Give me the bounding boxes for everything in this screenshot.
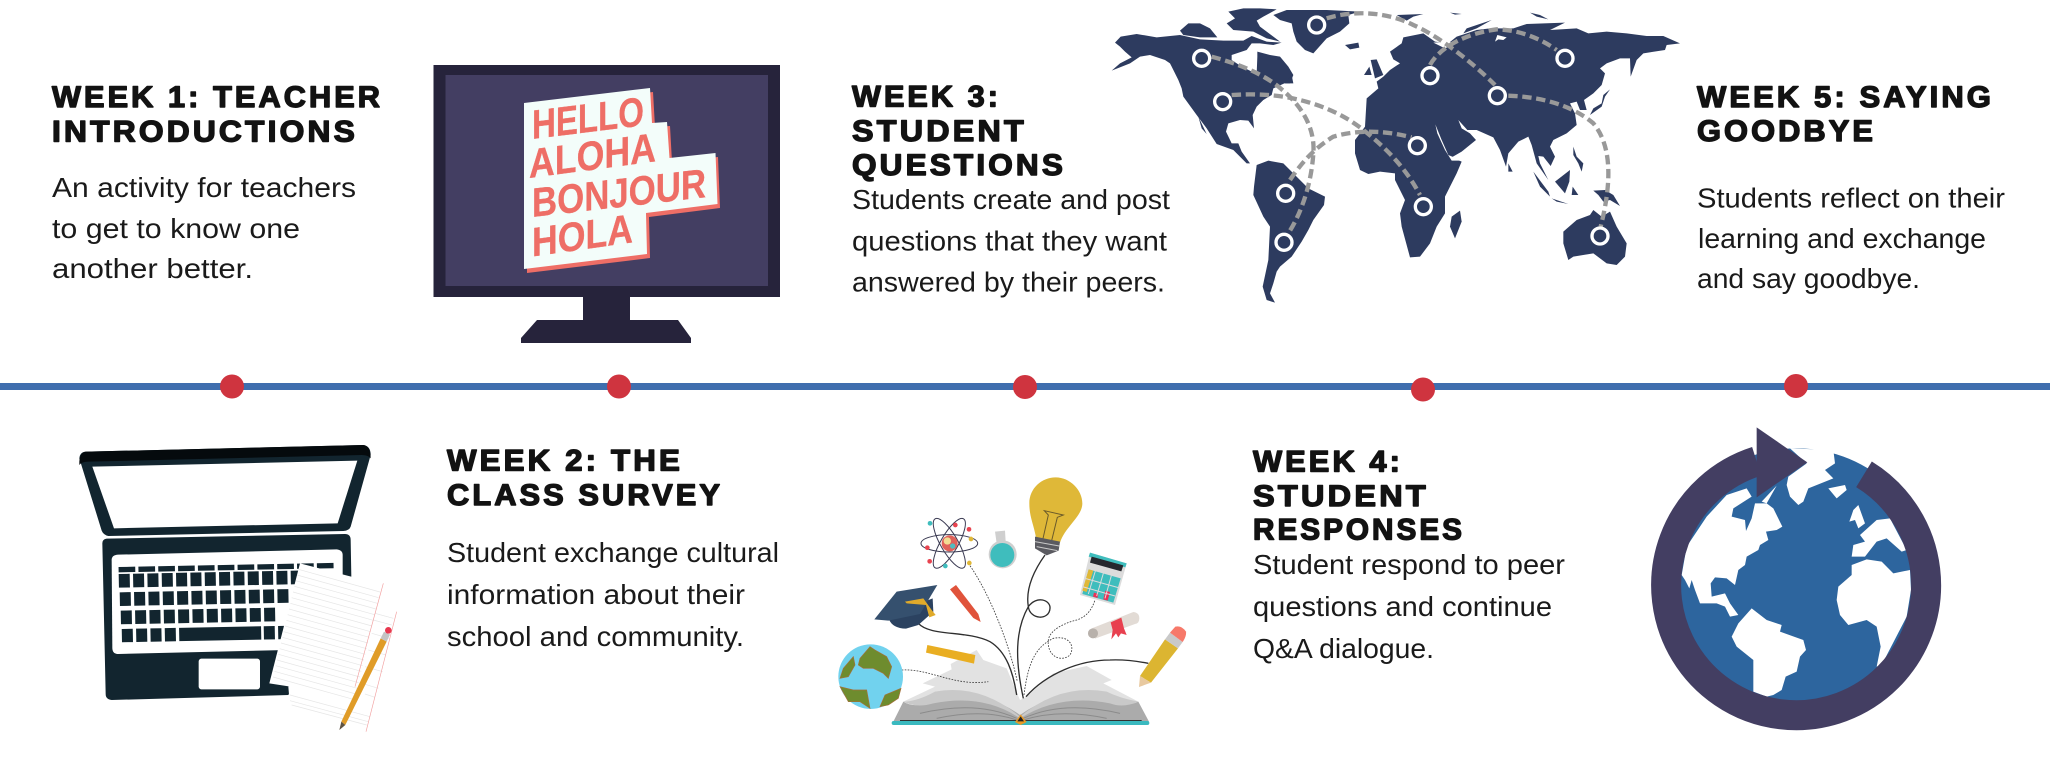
heading: week 4: RESPONSES xyxy=(1253,514,1465,546)
heading: week 3: QUESTIONS xyxy=(852,149,1066,182)
paper margin lines xyxy=(355,583,397,732)
calculator xyxy=(1080,553,1127,605)
pencil ferrule xyxy=(381,632,390,642)
pencil wood tip xyxy=(1139,676,1151,687)
timeline dot week 5 xyxy=(1784,374,1808,398)
circular arrow head xyxy=(1757,427,1807,497)
text block: week 4 xyxy=(1253,549,1565,664)
map: islands xyxy=(1397,13,1627,265)
monitor screen xyxy=(446,75,768,286)
text block: week 1: to get to know one xyxy=(52,213,300,244)
text block: week 3: answered by their peers. xyxy=(852,266,1165,298)
book cover xyxy=(892,721,1149,725)
text block: week 5: and say goodbye. xyxy=(1697,263,1920,294)
timeline line xyxy=(0,383,2050,390)
cap tassel xyxy=(905,598,936,617)
panel: week 3 text xyxy=(852,80,1170,298)
keyboard keys xyxy=(119,563,335,642)
panel: week 5 text xyxy=(1697,81,2005,294)
heading: week 3 xyxy=(852,80,1066,182)
scroll ribbon xyxy=(1111,618,1127,639)
pencil body xyxy=(341,638,387,725)
panel: week 1 text xyxy=(52,81,383,284)
panel: week 2 text xyxy=(447,444,779,652)
text block: week 5: Students reflect on their xyxy=(1697,182,2005,214)
map: location markers xyxy=(1194,17,1608,250)
text block: week 3: Students create and post xyxy=(852,184,1170,215)
text block: week 4: questions and continue xyxy=(1253,591,1552,622)
heading: week 5 xyxy=(1697,81,1994,148)
text block: week 2: school and community. xyxy=(447,621,744,652)
greeting sign shadow xyxy=(527,92,720,273)
dashed curves xyxy=(902,563,1095,695)
pencil ferrule xyxy=(1165,633,1183,648)
heading: week 3: STUDENT xyxy=(852,115,1027,148)
bulb glass xyxy=(1029,477,1082,543)
timeline xyxy=(0,374,2050,402)
heading: week 4 xyxy=(1253,446,1465,546)
yellow pencil xyxy=(1139,626,1186,687)
map: seas xyxy=(1433,35,1507,161)
flask xyxy=(989,531,1017,568)
text block: week 3 xyxy=(852,184,1170,298)
laptop lid top edge xyxy=(79,445,371,465)
timeline dot week 1 xyxy=(220,374,244,398)
heading: week 3: WEEK 3: xyxy=(852,80,1001,114)
graduation cap xyxy=(874,585,937,629)
book flying pages xyxy=(903,650,1138,720)
heading: week 2: WEEK 2: THE xyxy=(447,444,683,478)
pencil eraser xyxy=(385,627,392,634)
paper rule lines xyxy=(273,569,393,725)
text block: week 2: Student exchange cultural xyxy=(447,537,779,568)
pencil eraser xyxy=(1170,626,1186,642)
solid curves xyxy=(918,555,1148,698)
icon: globe with circular arrow xyxy=(1660,427,1933,722)
map: americas xyxy=(1112,8,1383,303)
heading: week 4: STUDENT xyxy=(1253,480,1429,513)
pencil xyxy=(339,627,392,730)
atom orbits xyxy=(921,514,978,572)
atom nucleus xyxy=(942,535,958,551)
text block: week 5 xyxy=(1697,182,2005,294)
icon: monitor with greetings xyxy=(434,65,780,343)
red pencil xyxy=(950,585,981,622)
heading: week 4: WEEK 4: xyxy=(1253,446,1403,478)
calculator display xyxy=(1090,557,1123,571)
heading: week 5: WEEK 5: SAYING xyxy=(1697,81,1994,114)
text block: week 1 xyxy=(52,172,356,284)
heading: week 5: GOODBYE xyxy=(1697,115,1876,148)
cap base xyxy=(889,598,933,629)
circular arrow ring xyxy=(1666,461,1926,715)
monitor stand xyxy=(521,297,691,343)
heading: week 1: INTRODUCTIONS xyxy=(52,116,358,148)
light bulb xyxy=(1029,477,1082,555)
calculator body xyxy=(1080,553,1127,605)
icon: open book with learning objects xyxy=(838,477,1186,725)
panel: week 4 text xyxy=(1253,446,1565,664)
heading: week 1 xyxy=(52,81,383,148)
keyboard area xyxy=(112,549,343,654)
timeline dot week 2 xyxy=(607,374,631,398)
atom xyxy=(921,514,978,572)
text block: week 2 xyxy=(447,537,779,652)
monitor frame xyxy=(434,65,780,297)
small globe ocean xyxy=(838,644,903,709)
heading: week 2 xyxy=(447,444,723,512)
map: eurasia and africa xyxy=(1355,23,1680,257)
scroll paper xyxy=(1092,612,1139,639)
small globe xyxy=(838,644,903,709)
bulb base xyxy=(1035,537,1060,555)
laptop base xyxy=(102,534,351,700)
greeting words xyxy=(529,88,706,265)
bulb filament xyxy=(1043,511,1063,541)
text block: week 5: learning and exchange xyxy=(1698,223,1986,254)
atom electrons xyxy=(928,521,932,526)
text block: week 1: An activity for teachers xyxy=(52,172,356,203)
greeting words: HELLO xyxy=(532,88,644,148)
cap board xyxy=(874,585,937,621)
small globe land xyxy=(840,647,901,708)
greeting sign xyxy=(524,88,718,269)
diploma scroll xyxy=(1088,612,1139,639)
book inner pages xyxy=(903,690,1138,718)
globe land xyxy=(1682,448,1911,697)
map: dashed routes xyxy=(1212,13,1608,233)
flask body xyxy=(989,540,1017,568)
text block: week 1: another better. xyxy=(52,253,253,284)
trackpad xyxy=(199,659,260,689)
heading: week 1: WEEK 1: TEACHER xyxy=(52,81,383,114)
timeline dot week 4 xyxy=(1411,378,1435,402)
text block: week 4: Student respond to peer xyxy=(1253,549,1565,580)
greeting words: ALOHA xyxy=(529,124,656,187)
pencil body xyxy=(1140,639,1178,683)
greeting words: BONJOUR xyxy=(532,160,706,226)
pencil tip xyxy=(339,722,345,730)
laptop lid xyxy=(79,445,371,536)
timeline dot week 3 xyxy=(1013,375,1037,399)
text block: week 3: questions that they want xyxy=(852,226,1167,256)
greeting words: HOLA xyxy=(532,205,633,265)
text block: week 4: Q&A dialogue. xyxy=(1253,633,1434,664)
laptop screen xyxy=(92,461,357,528)
globe ocean xyxy=(1660,448,1933,722)
book spine xyxy=(1015,714,1027,725)
icon: world map with routes xyxy=(1112,8,1680,303)
paper sheet xyxy=(269,563,383,697)
icon: laptop with paper and pencil xyxy=(79,445,397,732)
book page block xyxy=(893,695,1149,722)
calculator keys xyxy=(1082,569,1121,603)
heading: week 2: CLASS SURVEY xyxy=(447,479,723,512)
text block: week 2: information about their xyxy=(447,579,745,610)
ruler xyxy=(926,645,975,664)
flask neck xyxy=(995,531,1006,543)
